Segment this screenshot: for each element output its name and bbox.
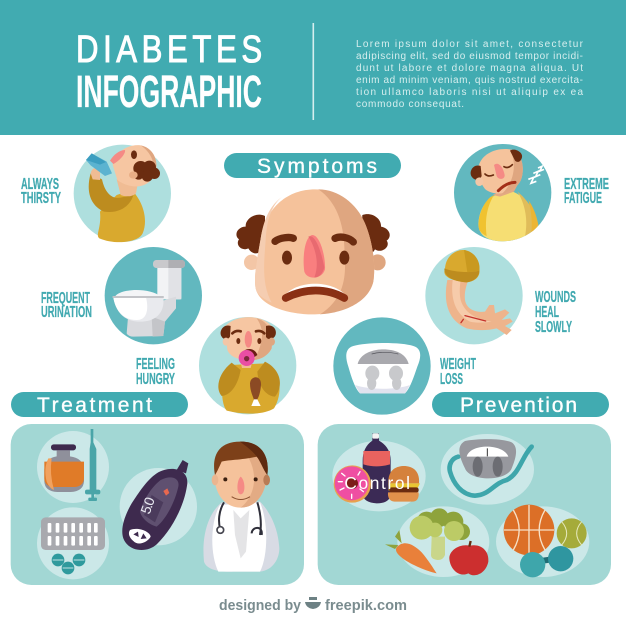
- panel: prevention: [318, 424, 611, 585]
- footer credit: designed by: [219, 597, 302, 614]
- left symptoms column: [21, 145, 296, 414]
- intro paragraph: tion ullamco laboris nisi ut aliquip ex ea: [356, 87, 583, 98]
- label: weight loss: WEIGHT: [440, 356, 476, 373]
- intro paragraph: dunt ut labore et dolore magna aliqua. Ut: [356, 63, 583, 74]
- symptom: wounds heal slowly: [425, 247, 523, 344]
- footer credit: [219, 597, 407, 614]
- footer credit: freepik.com: [325, 597, 407, 614]
- symptom: extreme fatigue: [454, 144, 551, 242]
- label: frequent urination: [41, 290, 92, 321]
- label: frequent urination: URINATION: [41, 304, 92, 321]
- heading: treatment: [11, 392, 188, 417]
- heading: symptoms: Symptoms: [257, 155, 377, 178]
- intro paragraph: adipiscing elit, sed do eiusmod tempor incidi-: [356, 51, 583, 62]
- panel: treatment: [11, 424, 304, 585]
- icon: unhealthy food: [332, 433, 426, 511]
- intro paragraph: enim ad minim veniam, quis nostrud exercita-: [356, 75, 583, 86]
- label: feeling hungry: HUNGRY: [136, 371, 175, 388]
- label: always thirsty: [21, 176, 61, 207]
- icon: exercise equipment: [496, 505, 589, 577]
- big sad face: [236, 189, 390, 314]
- heading: treatment: Treatment: [37, 394, 152, 417]
- title: DIABETES: [76, 29, 262, 71]
- header banner: [0, 0, 626, 135]
- symptom: weight loss: [333, 317, 431, 415]
- label: always thirsty: THIRSTY: [21, 190, 61, 207]
- label: weight loss: LOSS: [440, 371, 463, 388]
- heading: prevention: [432, 392, 609, 417]
- title: INFOGRAPHIC: [76, 66, 262, 117]
- intro paragraph: commodo consequat.: [356, 99, 464, 110]
- symptom: frequent urination: [105, 247, 202, 344]
- icon: healthy food: [385, 506, 489, 577]
- label: wounds heal slowly: HEAL: [535, 304, 559, 321]
- heading: symptoms: [224, 153, 401, 178]
- icon: scale and tape: [441, 434, 534, 505]
- symptom: always thirsty: [74, 145, 171, 242]
- label: wounds heal slowly: SLOWLY: [535, 319, 572, 336]
- label: frequent urination: FREQUENT: [41, 290, 90, 307]
- symptom: feeling hungry: [199, 317, 296, 414]
- icon: glucose meter: 5.0: [137, 495, 158, 516]
- doctor figure: [203, 442, 279, 572]
- icon: pills: [37, 507, 109, 579]
- icon: insulin jar and syringe: [37, 429, 109, 503]
- label: wounds heal slowly: [535, 289, 576, 336]
- heading: control: Control: [344, 473, 410, 493]
- icon: glucose meter: [120, 460, 197, 550]
- label: feeling hungry: [136, 356, 175, 388]
- right symptoms column: [333, 144, 609, 415]
- label: weight loss: [440, 356, 476, 388]
- title: [76, 29, 262, 117]
- label: extreme fatigue: [564, 176, 609, 207]
- label: wounds heal slowly: WOUNDS: [535, 289, 576, 306]
- intro paragraph: [356, 39, 584, 110]
- intro paragraph: Lorem ipsum dolor sit amet, consectetur: [356, 39, 584, 50]
- heading: prevention: Prevention: [460, 394, 577, 417]
- label: always thirsty: ALWAYS: [21, 176, 59, 193]
- label: feeling hungry: FEELING: [136, 356, 175, 373]
